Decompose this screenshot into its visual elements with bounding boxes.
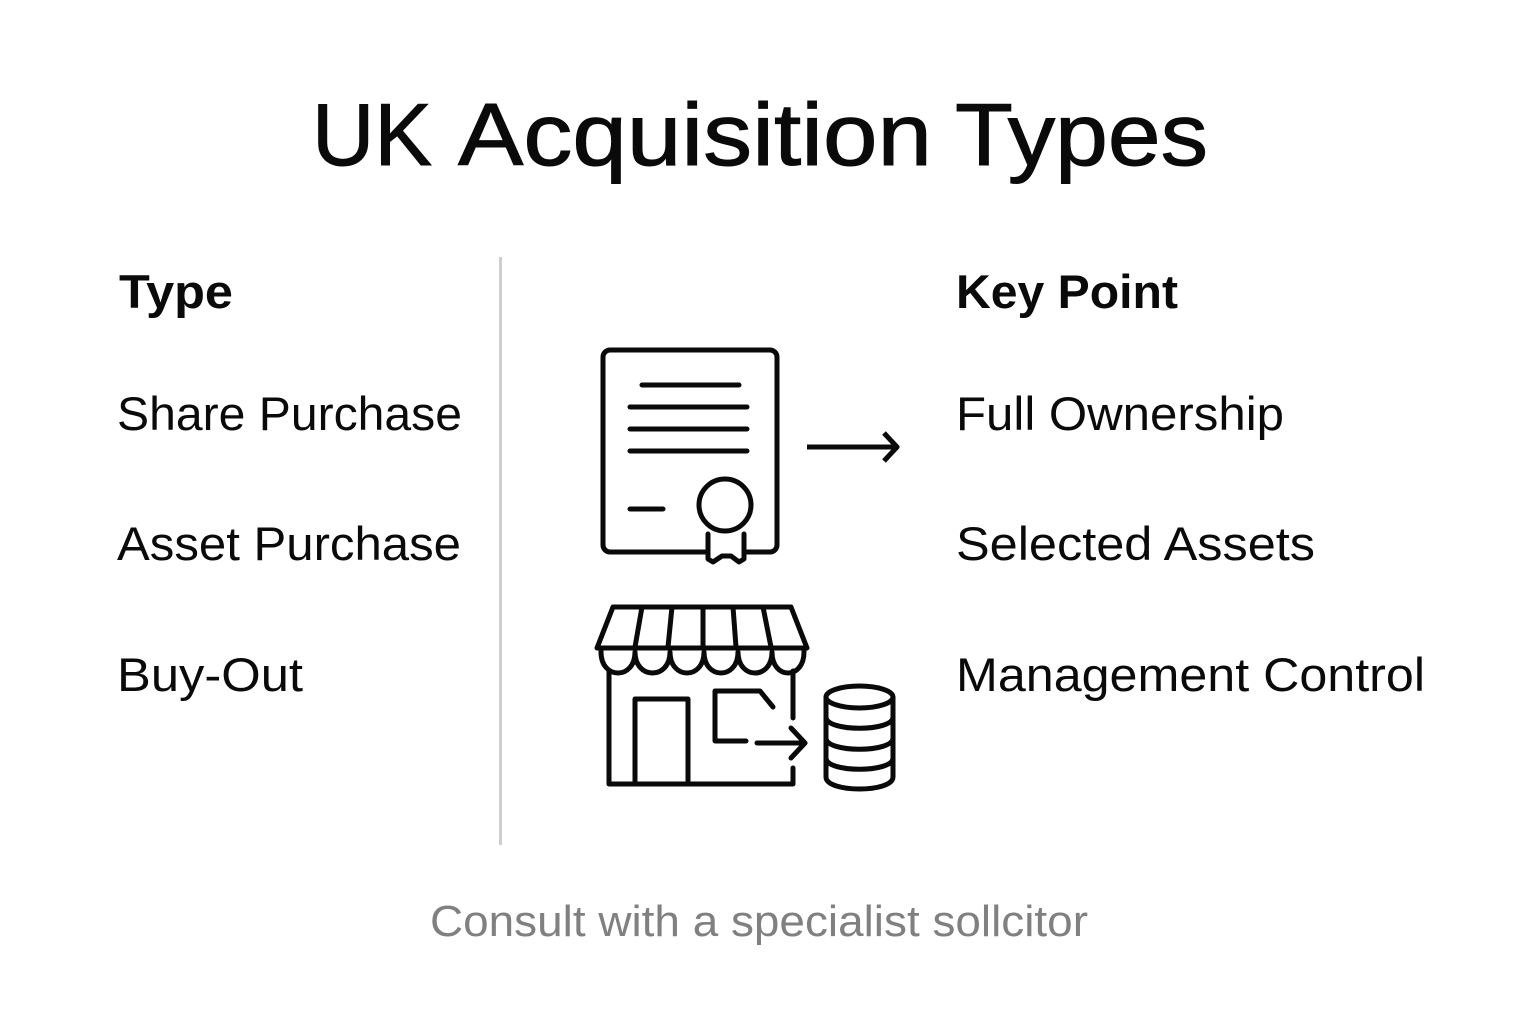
text: Share Purchase: Share Purchase bbox=[117, 387, 462, 440]
footer note: Consult with a specialist sollcitor bbox=[430, 897, 1088, 946]
heading: Key Point: Key Point bbox=[956, 265, 1178, 318]
text: Buy-Out: Buy-Out bbox=[117, 648, 303, 701]
heading: Type: Type bbox=[119, 265, 233, 318]
panel: type column bbox=[117, 265, 462, 701]
title: Types bbox=[955, 85, 1208, 184]
arrow: certificate to key point bbox=[807, 433, 897, 461]
icon: database cylinder bbox=[826, 686, 893, 789]
panel: key point column bbox=[956, 265, 1425, 701]
title: Acquisition bbox=[458, 85, 932, 184]
title bbox=[312, 85, 1208, 184]
icon: certificate document bbox=[603, 350, 777, 562]
text: Management Control: Management Control bbox=[956, 648, 1425, 701]
title: UK bbox=[312, 85, 432, 184]
text: Asset Purchase: Asset Purchase bbox=[117, 517, 461, 570]
text: Selected Assets: Selected Assets bbox=[956, 517, 1315, 570]
text: Full Ownership: Full Ownership bbox=[956, 387, 1284, 440]
icon: shop with asset transfer bbox=[597, 607, 807, 784]
